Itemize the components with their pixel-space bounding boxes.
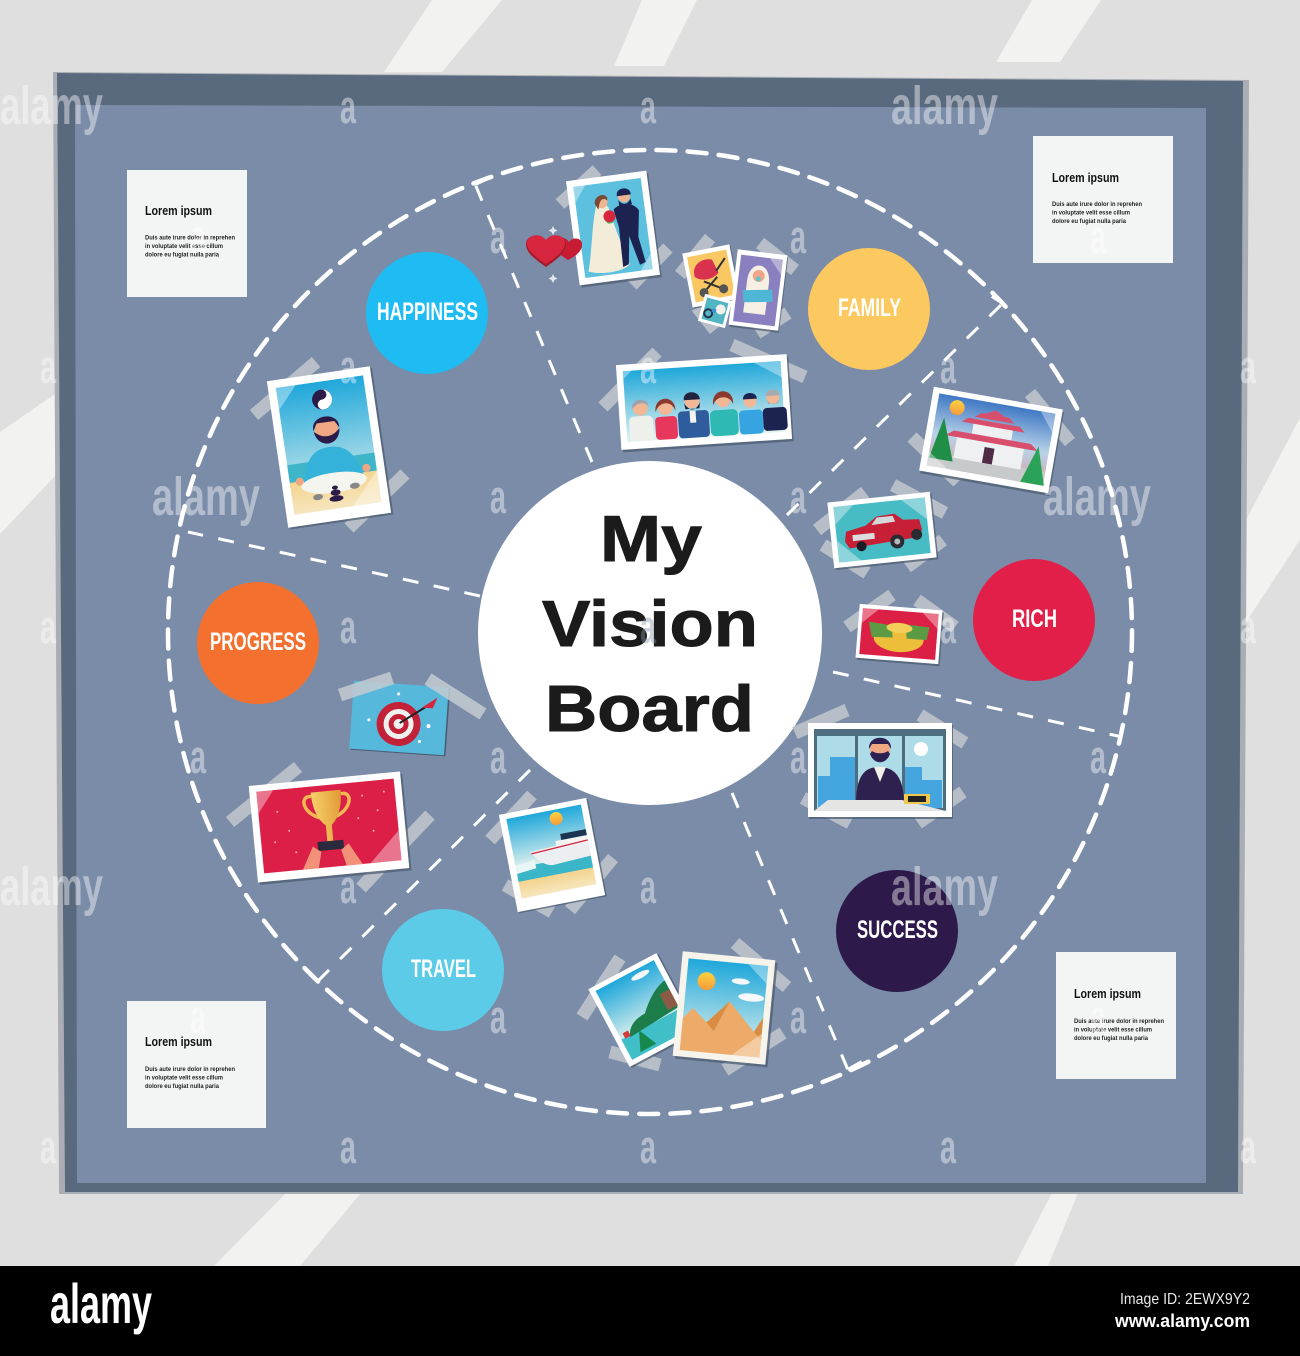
- badge: family: [808, 248, 930, 370]
- photo: trophy: [230, 767, 430, 888]
- watermark: repeated stock marks: a: [40, 1120, 57, 1173]
- watermark: repeated stock marks: a: [490, 470, 507, 523]
- badge: happiness: HAPPINESS: [377, 298, 478, 326]
- watermark: repeated stock marks: alamy: [891, 76, 998, 136]
- note: top right: in voluptate velit esse cillum: [1052, 210, 1130, 216]
- photo: pacifier: [698, 294, 732, 328]
- image id: Image ID: 2EWX9Y2: [1120, 1291, 1250, 1308]
- watermark: repeated stock marks: a: [340, 1120, 357, 1173]
- photo: businessman in office: [795, 710, 965, 823]
- watermark: repeated stock marks: a: [40, 340, 57, 393]
- note: bottom left: [127, 1001, 266, 1128]
- watermark: repeated stock marks: a: [640, 860, 657, 913]
- centre title: Vision: [542, 587, 758, 660]
- note: top left: dolore eu fugiat nulla paria: [145, 252, 219, 258]
- badge: family: FAMILY: [838, 294, 901, 322]
- badge: success: [836, 870, 958, 992]
- watermark: repeated stock marks: a: [790, 210, 807, 263]
- watermark: repeated stock marks: a: [1090, 730, 1107, 783]
- watermark: repeated stock marks: a: [640, 80, 657, 133]
- watermark: repeated stock marks: alamy: [152, 467, 260, 527]
- website: www.alamy.com: [1114, 1311, 1250, 1331]
- watermark: repeated stock marks: a: [940, 340, 957, 393]
- centre title: Board: [545, 672, 754, 745]
- watermark: repeated stock marks: a: [340, 340, 357, 393]
- photo: wedding: [560, 170, 668, 288]
- note: top left: [127, 170, 247, 297]
- watermark: repeated stock marks: a: [490, 730, 507, 783]
- wheel spokes: [188, 184, 1122, 1070]
- note: top right: Duis aute irure dolor in reprehen: [1052, 201, 1142, 208]
- watermark: repeated stock marks: a: [340, 860, 357, 913]
- watermark: repeated stock marks: a: [340, 80, 357, 133]
- watermark: repeated stock marks: alamy: [0, 857, 103, 917]
- photo: family portrait: [603, 345, 805, 452]
- dashed wheel outline: [168, 150, 1132, 1114]
- watermark: repeated stock marks: alamy: [1043, 467, 1151, 527]
- watermark: repeated stock marks: a: [1240, 600, 1257, 653]
- photo: stroller: [680, 238, 741, 330]
- photo: cruise ship: [490, 795, 613, 914]
- watermark: repeated stock marks: a: [40, 600, 57, 653]
- watermark: repeated stock marks: a: [1090, 210, 1107, 263]
- badge: travel: TRAVEL: [411, 955, 476, 983]
- note: top left: in voluptate velit esse cillum: [145, 243, 223, 250]
- watermark: repeated stock marks: a: [1090, 990, 1107, 1043]
- watermark: repeated stock marks: a: [940, 1120, 957, 1173]
- note: top right: [1033, 136, 1173, 263]
- note: top right: dolore eu fugiat nulla paria: [1052, 218, 1126, 225]
- watermark: repeated stock marks: a: [790, 730, 807, 783]
- note: bottom right: [1056, 952, 1176, 1079]
- note: top right: Lorem ipsum: [1052, 170, 1119, 185]
- photo: baby: [728, 243, 795, 333]
- centre title: My: [600, 502, 702, 575]
- watermark: repeated stock marks: a: [1240, 1120, 1257, 1173]
- photo: red car: [817, 485, 945, 573]
- note: bottom right: Lorem ipsum: [1074, 986, 1141, 1001]
- note: bottom right: dolore eu fugiat nulla paria: [1074, 1035, 1148, 1042]
- note: bottom right: in voluptate velit esse cillum: [1074, 1026, 1152, 1034]
- note: top left: Duis aute irure dolor in reprehen: [145, 234, 235, 242]
- note: bottom left: Lorem ipsum: [145, 1034, 212, 1049]
- watermark: repeated stock marks: alamy: [0, 76, 103, 136]
- icon: hearts: [526, 226, 582, 283]
- photo: mansion: [912, 387, 1070, 496]
- watermark: repeated stock marks: a: [640, 600, 657, 653]
- watermark: repeated stock marks: a: [190, 990, 207, 1043]
- photo: tropical island: [582, 952, 700, 1069]
- watermark: repeated stock marks: a: [190, 210, 207, 263]
- vision board frame: [53, 72, 1249, 1194]
- watermark: repeated stock marks: a: [790, 470, 807, 523]
- watermark: repeated stock marks: a: [640, 340, 657, 393]
- photo: money: [847, 595, 955, 666]
- photo: pyramids: [672, 943, 787, 1070]
- note: bottom right: Duis aute irure dolor in reprehen: [1074, 1018, 1164, 1025]
- badge: progress: PROGRESS: [210, 628, 306, 656]
- badge: progress: [197, 582, 319, 704]
- watermark: repeated stock marks: [0, 76, 1257, 1173]
- note: bottom left: dolore eu fugiat nulla paria: [145, 1083, 219, 1090]
- watermark: repeated stock marks: a: [490, 210, 507, 263]
- watermark: repeated stock marks: a: [790, 990, 807, 1043]
- watermark: repeated stock marks: a: [640, 1120, 657, 1173]
- footer logo: alamy: [50, 1272, 152, 1335]
- watermark: repeated stock marks: a: [1240, 340, 1257, 393]
- badge: travel: [382, 909, 504, 1031]
- watermark: repeated stock marks: alamy: [891, 857, 998, 917]
- badge: happiness: [366, 252, 488, 374]
- photo: target and dart: [340, 678, 483, 756]
- footer bar: [0, 1266, 1300, 1356]
- badge: rich: [973, 559, 1095, 681]
- photo: meditation: [254, 362, 405, 530]
- centre title: [478, 461, 822, 805]
- watermark: repeated stock marks: a: [190, 730, 207, 783]
- badge: success: SUCCESS: [857, 916, 938, 944]
- note: top left: Lorem ipsum: [145, 203, 212, 218]
- note: bottom left: in voluptate velit esse cillum: [145, 1074, 223, 1082]
- watermark: repeated stock marks: a: [490, 990, 507, 1043]
- watermark: repeated stock marks: a: [340, 600, 357, 653]
- watermark: repeated stock marks: a: [940, 600, 957, 653]
- note: bottom left: Duis aute irure dolor in reprehen: [145, 1066, 235, 1073]
- badge: rich: RICH: [1012, 605, 1057, 633]
